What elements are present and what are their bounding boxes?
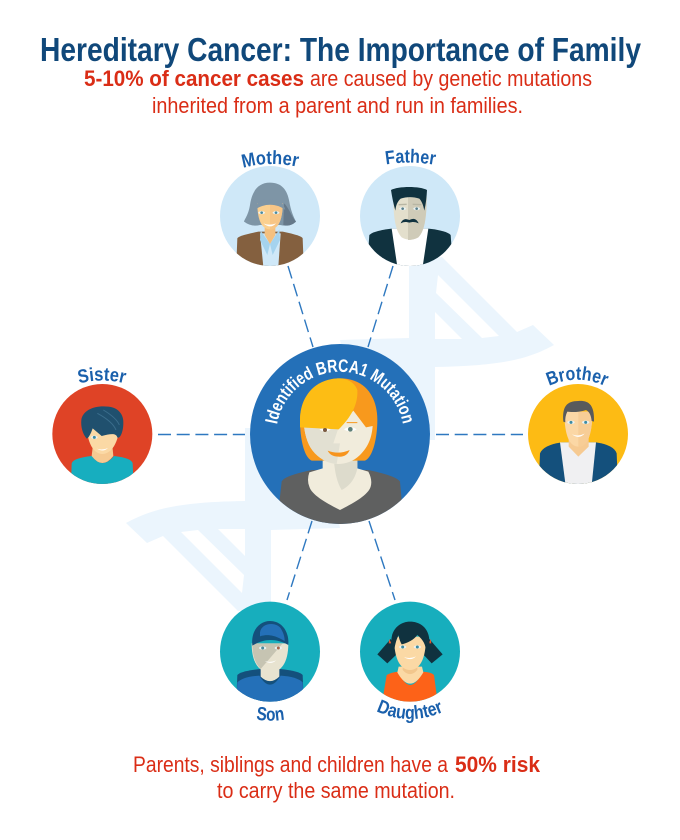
bottom note: 50% risk (455, 752, 541, 777)
subtitle: are caused by genetic mutations (310, 66, 592, 91)
avatar: mother (220, 166, 320, 273)
avatar: daughter (360, 602, 460, 708)
bottom note: to carry the same mutation. (217, 778, 455, 803)
DNA helix background (126, 257, 554, 611)
subtitle (84, 66, 592, 118)
avatar: son (220, 602, 320, 708)
center badge label: Identified BRCA1 Mutation (265, 359, 412, 424)
avatar: father (360, 166, 460, 273)
label: Daughter: Daughter (377, 700, 441, 723)
label: Son: Son (256, 707, 284, 721)
dashed connectors (158, 266, 523, 600)
avatar: sister (52, 384, 152, 493)
avatar: center woman (250, 344, 430, 527)
label: Father: Father (385, 148, 436, 164)
bottom note: Parents, siblings and children have a (133, 752, 449, 777)
subtitle: inherited from a parent and run in families. (152, 93, 523, 118)
avatar: brother (528, 384, 628, 495)
label: Brother: Brother (546, 366, 609, 386)
subtitle: 5-10% of cancer cases (84, 66, 304, 91)
label: Mother: Mother (241, 150, 300, 168)
bottom note (133, 752, 541, 803)
label: Sister: Sister (78, 367, 126, 383)
